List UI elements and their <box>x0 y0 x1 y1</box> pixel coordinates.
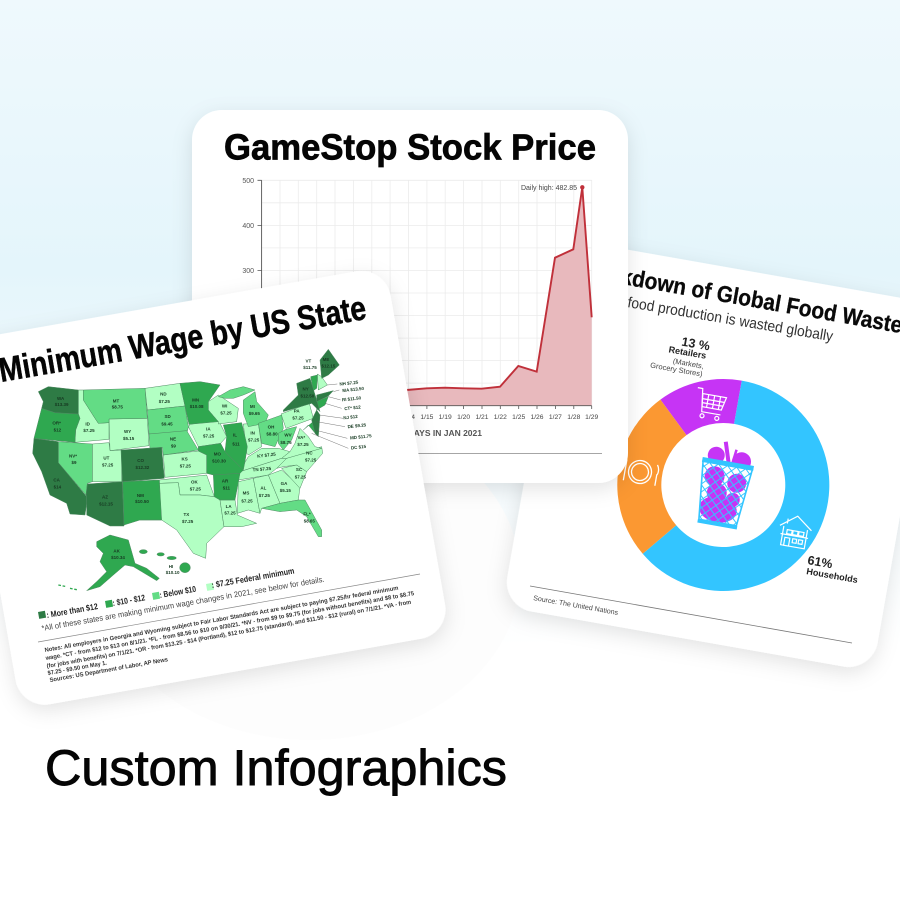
US map: UT <box>103 456 110 461</box>
US map: NY <box>303 387 309 392</box>
line chart: 1/15 <box>420 414 434 421</box>
US map: NC <box>306 451 313 456</box>
food card source: Source: The United Nations <box>533 595 619 617</box>
US map: $7.25 <box>292 416 304 421</box>
US map: AL <box>260 486 267 491</box>
map divider <box>38 574 420 642</box>
label: retailers 13% <box>650 335 711 379</box>
US map: WY <box>124 429 131 434</box>
US map: MI <box>250 404 255 409</box>
US map: MS <box>243 491 249 496</box>
label: households 61%: 61% <box>806 553 834 571</box>
map card title: Minimum Wage by US State <box>0 289 369 390</box>
US map: SD <box>165 414 172 419</box>
line chart: 1/19 <box>439 414 452 421</box>
US map: $8.75 <box>112 404 123 409</box>
US map: ND <box>160 392 167 397</box>
US map: KS <box>182 456 188 461</box>
map notes: $7.25 - $9.50 on May 1. <box>47 661 108 677</box>
US map: IL <box>233 432 237 437</box>
US map: VA* <box>298 435 305 440</box>
US map: $12.15 <box>99 501 113 506</box>
line chart: 300 <box>242 268 254 275</box>
line chart <box>226 178 598 421</box>
line chart: 1/14 <box>402 414 415 421</box>
food card divider <box>530 586 852 643</box>
US map: $10.50 <box>135 499 149 504</box>
map legend <box>38 565 295 620</box>
map notes: Sources: US Department of Labor, AP News <box>49 657 169 684</box>
US map: FL* <box>303 512 311 517</box>
US map: ID <box>85 422 91 427</box>
line chart: 1/29 <box>585 414 598 421</box>
chart title: GameStop Stock Price <box>224 126 596 168</box>
US map: $7.25 <box>190 486 201 491</box>
map footnote: *All of these states are making minimum wage changes in 2021, see below for details. <box>41 575 325 633</box>
US map: PA <box>294 409 300 414</box>
US map: RI $11.50 <box>342 395 362 402</box>
map legend: : Below $10 <box>159 584 197 600</box>
US map: CO <box>137 458 145 463</box>
US map: MD $11.75 <box>350 433 372 440</box>
US map: OK <box>191 480 198 485</box>
US map: NE <box>170 436 176 441</box>
US map: MA $13.50 <box>342 386 365 393</box>
US map: $7.25 <box>83 428 95 433</box>
US map: WA <box>57 396 65 401</box>
US map: ME <box>323 357 329 362</box>
map notes: wage. *CT - from $12 to $13 on 8/1/21. *FL - from $8.56 to $10 on 9/30/21. *NV - from $9 to $9.75 (for jobs without benefits) and $8 to $8.75 <box>44 591 415 662</box>
map legend: : $10 - $12 <box>112 592 146 608</box>
line chart: Daily high: 482.85 <box>521 185 577 192</box>
main caption: Custom Infographics <box>45 740 507 796</box>
US map: $9 <box>171 443 176 448</box>
US map: MO <box>214 452 221 457</box>
US map: $7.25 <box>241 498 253 503</box>
US map: MT <box>113 398 119 403</box>
US map: $10.30 <box>212 458 226 463</box>
US map: $9.45 <box>161 422 173 427</box>
map legend: : More than $12 <box>46 601 99 620</box>
line chart: 1/26 <box>530 414 544 421</box>
US map: $8.80 <box>266 432 278 437</box>
label: retailers 13%: Retailers <box>668 344 707 361</box>
line chart: 1/27 <box>549 414 562 421</box>
US map: SC <box>296 467 303 472</box>
US map: $8.65 <box>304 518 315 523</box>
US map: $11 <box>232 442 240 447</box>
line chart: 500 <box>242 178 254 185</box>
US map: $12.15 <box>321 364 336 369</box>
US map: IA <box>206 426 211 431</box>
US map: AZ <box>102 495 108 500</box>
US map: $10.08 <box>190 404 204 409</box>
label: retailers 13%: Grocery Stores) <box>650 361 704 379</box>
US map: $7.25 <box>180 464 191 469</box>
US map: $5.15 <box>280 488 291 493</box>
line chart: 1/22 <box>494 414 507 421</box>
US map: $8.75 <box>280 440 292 445</box>
US map: HI <box>169 564 173 569</box>
map notes: Notes: All employers in Georgia and Wyoming subject to Fair Labor Standards Act are subject to paying $7.25/hr federal minimum <box>44 586 399 654</box>
US map: DC $15 <box>351 444 367 450</box>
line chart: 400 <box>242 223 254 230</box>
icon: plate and cutlery <box>623 458 660 486</box>
US map <box>33 349 372 591</box>
US map: $7.25 <box>182 519 194 524</box>
US map: $10.10 <box>166 570 180 575</box>
US map: $7.25 <box>248 437 260 442</box>
US map: OR* <box>52 421 61 426</box>
US map: NM <box>137 493 144 498</box>
US map: AK <box>113 548 121 553</box>
panel: GameStop stock card <box>192 110 628 483</box>
chart divider <box>261 452 602 454</box>
label: retailers 13%: (Markets, <box>672 356 705 371</box>
line chart: Stock Price <box>226 297 233 330</box>
US map: NV* <box>69 453 77 458</box>
line chart: 1/20 <box>457 414 470 421</box>
US map: TN $7.25 <box>252 466 272 472</box>
chart x-axis title: TRADING DAYS IN JAN 2021 <box>367 428 482 438</box>
US map: GA <box>281 481 288 486</box>
map legend: : $7.25 Federal minimum <box>211 565 295 590</box>
US map: $11 <box>223 485 230 490</box>
US map: MN <box>192 397 199 402</box>
icon: house <box>777 513 814 550</box>
line chart: 1/28 <box>567 414 581 421</box>
US map: IN <box>250 430 255 435</box>
line chart: 1/21 <box>475 414 489 421</box>
label: households 61% <box>806 553 859 585</box>
US map: WI <box>222 403 227 408</box>
US map: $13.39 <box>55 402 69 407</box>
US map: $12 <box>54 427 62 432</box>
panel: food waste card <box>502 239 900 672</box>
US map: $12.50 <box>300 393 315 398</box>
US map: $7.25 <box>295 474 306 479</box>
label: households 61%: Households <box>806 566 859 585</box>
US map: $9 <box>71 460 77 465</box>
US map: NJ $12 <box>343 414 358 420</box>
US map: $7.25 <box>305 458 317 463</box>
US map: AR <box>222 478 229 483</box>
US map: VT <box>305 358 311 363</box>
US map: KY $7.25 <box>257 451 277 459</box>
US map: $7.25 <box>224 511 236 516</box>
donut chart <box>617 379 829 591</box>
food card subtitle: food production is wasted globally <box>626 294 835 345</box>
US map: LA <box>226 504 232 509</box>
background glow <box>100 410 520 740</box>
US map: DE $9.25 <box>347 422 367 429</box>
US map: $7.25 <box>297 442 309 447</box>
US map: $7.25 <box>259 493 270 498</box>
US map: OH <box>268 425 274 430</box>
US map: $14 <box>54 485 62 490</box>
US map: $5.15 <box>123 436 135 441</box>
US map: NH $7.25 <box>339 380 359 387</box>
US map: $11.75 <box>303 365 317 370</box>
US map: $7.25 <box>159 399 170 404</box>
US map: CA <box>53 477 61 482</box>
US map: TX <box>183 512 189 517</box>
US map: WV <box>284 433 292 438</box>
map notes: (for jobs with benefits) on 7/1/21. *OR - from $13.25 - $14 (Portland), $12 to $12.75 (standard), and $11.50 - $12 (rural) on 7/1/21. *VA - from <box>46 600 412 670</box>
icon: shopping cart <box>693 388 727 421</box>
US map: $12.32 <box>135 465 150 470</box>
icon: basket of food <box>691 438 757 530</box>
US map: $10.34 <box>111 555 125 560</box>
US map: $9.65 <box>249 411 260 416</box>
US map: CT* $12 <box>344 404 361 411</box>
US map: $7.25 <box>102 463 114 468</box>
US map: $7.25 <box>220 410 232 415</box>
label: retailers 13%: 13 % <box>680 335 711 353</box>
US map: $7.25 <box>203 433 215 438</box>
line chart: 1/25 <box>512 414 525 421</box>
panel: minimum wage card <box>0 266 450 709</box>
